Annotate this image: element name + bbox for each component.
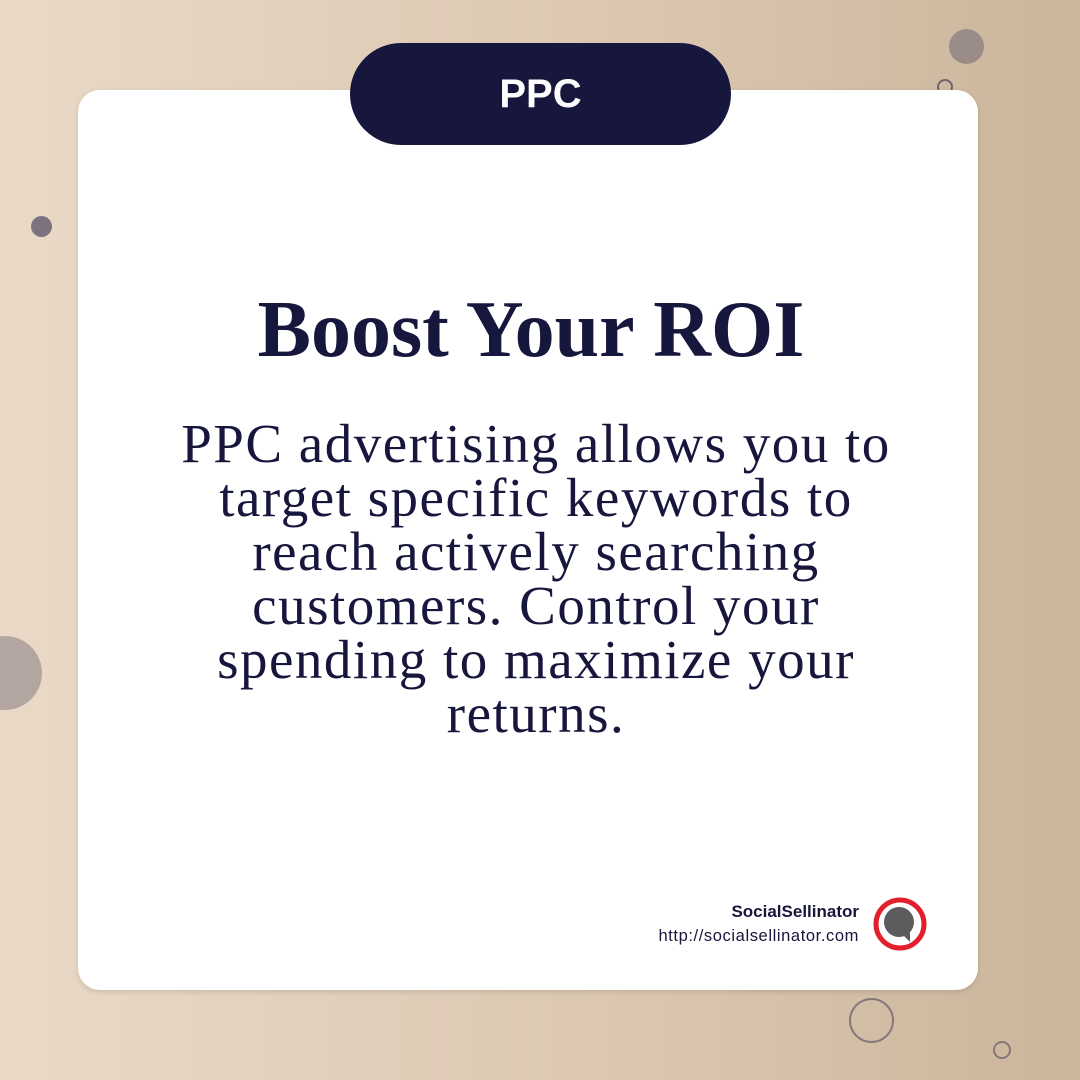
body text: reach actively searching	[252, 521, 820, 582]
brand text: http://socialsellinator.com	[658, 927, 859, 945]
body text: returns.	[447, 683, 625, 744]
decorative half circle left	[0, 636, 42, 710]
body text: target specific keywords to	[219, 467, 853, 528]
title: Boost Your ROI	[258, 286, 804, 374]
brand text	[658, 902, 859, 945]
pill label: PPC	[350, 43, 731, 145]
card	[78, 90, 978, 990]
brand text: SocialSellinator	[731, 902, 859, 921]
decorative circle top right	[949, 29, 984, 64]
decorative dot left	[31, 216, 52, 237]
pill label: PPC: PPC	[499, 72, 582, 116]
body text	[181, 413, 891, 744]
body text: spending to maximize your	[217, 629, 855, 690]
body text: PPC advertising allows you to	[181, 413, 891, 474]
decorative ring top	[937, 79, 953, 95]
icon: logo	[874, 898, 926, 950]
body text: customers. Control your	[252, 575, 820, 636]
decorative small ring bottom right	[993, 1041, 1011, 1059]
decorative ring bottom	[849, 998, 894, 1043]
